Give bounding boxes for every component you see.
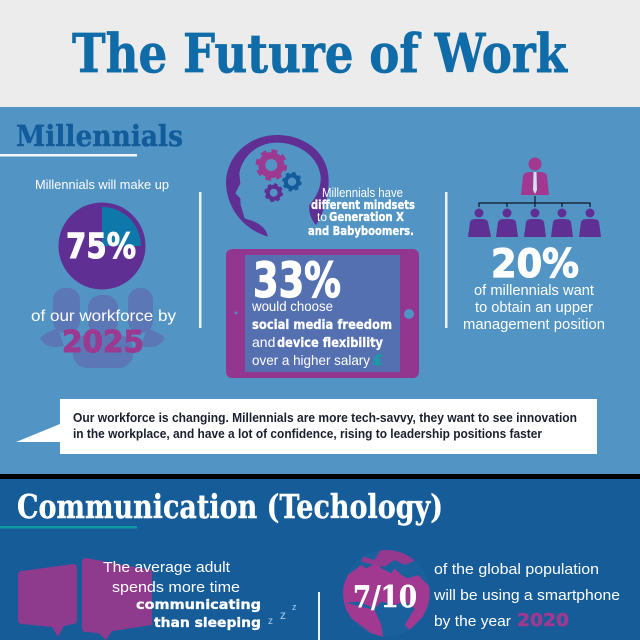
pie chart: 75%: 75% xyxy=(66,227,136,267)
text: different mindsets: Millennials have xyxy=(322,186,403,200)
icon: speech bubbles xyxy=(18,558,152,640)
stat: 20% upper management xyxy=(463,242,605,333)
text: communicating than sleeping: spends more time xyxy=(112,579,240,596)
stat: 20% upper management: to obtain an upper xyxy=(475,299,593,316)
icon: sleep z's: z xyxy=(268,616,273,627)
callout: Our workforce is changing. Millennials are more tech-savvy, they want to see innovation xyxy=(73,410,577,425)
stat: 20% upper management: of millennials want xyxy=(474,282,595,299)
stat: 20% upper management: 20% xyxy=(491,242,579,287)
text: different mindsets: and Babyboomers. xyxy=(308,224,414,238)
text: communicating than sleeping: communicating xyxy=(136,597,261,613)
icon: tablet with 33% stat: 33% xyxy=(253,253,341,309)
icon: sleep z's: z xyxy=(292,602,297,612)
text: smartphone by 2020 xyxy=(433,561,620,631)
icon: tablet with 33% stat xyxy=(226,249,419,378)
panel: millennials xyxy=(0,107,640,474)
icon: tablet with 33% stat: £ xyxy=(373,353,383,369)
text: communicating than sleeping: than sleeping xyxy=(154,615,261,631)
header band xyxy=(0,0,640,107)
stat: 20% upper management: management position xyxy=(463,316,605,333)
title: The Future of Work xyxy=(72,23,568,85)
icon: people silhouette xyxy=(40,288,165,368)
icon: tablet with 33% stat: device flexibility xyxy=(277,336,383,351)
icon: tablet with 33% stat: over a higher salary xyxy=(252,352,370,368)
text: different mindsets: to xyxy=(317,210,327,224)
heading: communication: Communication (Techology) xyxy=(17,487,443,526)
text: smartphone by 2020: by the year xyxy=(434,613,511,630)
callout: in the workplace, and have a lot of confidence, rising to leadership positions faster xyxy=(73,426,542,441)
text: different mindsets xyxy=(308,186,415,238)
stat: 7/10: 7/10 xyxy=(353,580,417,615)
icon: globe xyxy=(341,548,431,637)
stat: 75% workforce xyxy=(31,178,176,368)
icon: sleep z's: z xyxy=(280,608,286,622)
icon: org chart xyxy=(468,158,601,237)
text: smartphone by 2020: will be using a smartphone xyxy=(433,587,620,604)
icon: tablet with 33% stat: would choose xyxy=(251,298,333,314)
icon: tablet with 33% stat: social media freedom xyxy=(252,318,392,333)
pie chart: 75% xyxy=(58,202,146,290)
text: smartphone by 2020: of the global population xyxy=(434,561,599,578)
callout xyxy=(16,399,597,454)
text: different mindsets: different mindsets xyxy=(311,198,415,212)
text: communicating than sleeping xyxy=(103,559,261,631)
heading: millennials: Millennials xyxy=(16,119,183,153)
year 2025: 2025 xyxy=(62,325,144,360)
stat: 75% workforce: Millennials will make up xyxy=(35,178,169,192)
stat: 75% workforce: of our workforce by xyxy=(31,308,176,325)
text: communicating than sleeping: The average adult xyxy=(103,559,231,576)
text: different mindsets: Generation X xyxy=(329,210,405,224)
panel: communication xyxy=(0,479,640,640)
icon: tablet with 33% stat: and xyxy=(252,334,275,350)
icon: sleep z's xyxy=(268,602,297,627)
text: smartphone by 2020: 2020 xyxy=(517,610,569,631)
icon: head with gears xyxy=(226,135,329,237)
